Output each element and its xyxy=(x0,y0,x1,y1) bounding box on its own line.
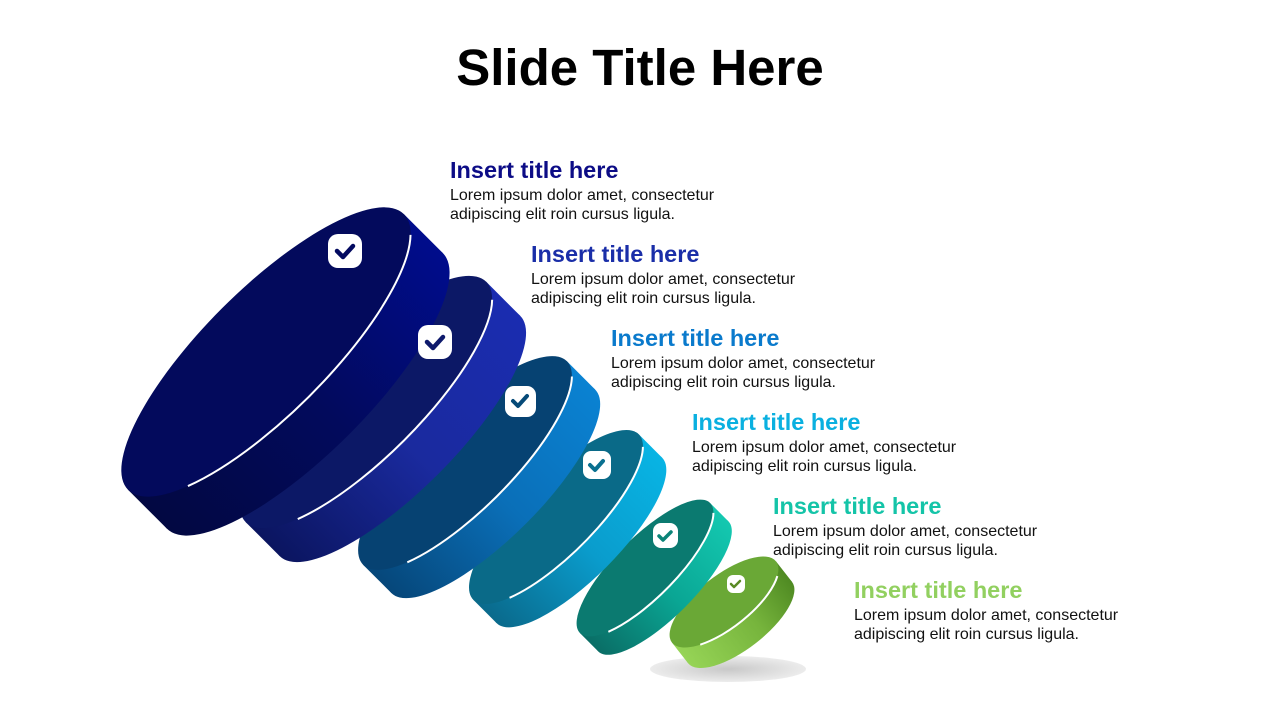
text block 4 xyxy=(692,409,956,475)
disc 1 xyxy=(84,170,487,573)
icon: check 4 xyxy=(583,451,611,479)
text block 6: adipiscing elit roin cursus ligula. xyxy=(854,626,1079,643)
text block 2: Lorem ipsum dolor amet, consectetur xyxy=(531,271,795,288)
text block 3: Insert title here xyxy=(611,325,779,351)
text block 1: Insert title here xyxy=(450,157,618,183)
disc 4 xyxy=(446,407,689,650)
text block 6: Insert title here xyxy=(854,577,1022,603)
text block 1: adipiscing elit roin cursus ligula. xyxy=(450,206,675,223)
text block 5: Lorem ipsum dolor amet, consectetur xyxy=(773,523,1037,540)
title: Slide Title Here xyxy=(456,39,824,96)
disc 3 xyxy=(331,329,628,626)
text block 3 xyxy=(611,325,875,391)
icon: check 5 xyxy=(653,523,678,548)
text block 5: adipiscing elit roin cursus ligula. xyxy=(773,542,998,559)
text block 2: adipiscing elit roin cursus ligula. xyxy=(531,290,756,307)
text block 6 xyxy=(854,577,1118,643)
text block 1: Lorem ipsum dolor amet, consectetur xyxy=(450,187,714,204)
text block 5 xyxy=(773,493,1037,559)
text block 4: adipiscing elit roin cursus ligula. xyxy=(692,458,917,475)
text block 6: Lorem ipsum dolor amet, consectetur xyxy=(854,607,1118,624)
text block 4: Lorem ipsum dolor amet, consectetur xyxy=(692,439,956,456)
icon: check 2 xyxy=(418,325,452,359)
icon: check 1 xyxy=(328,234,362,268)
text block 1 xyxy=(450,157,714,223)
text block 4: Insert title here xyxy=(692,409,860,435)
text block 2 xyxy=(531,241,795,307)
disc 5 xyxy=(559,482,750,673)
icon: check 3 xyxy=(505,386,536,417)
text block 3: Lorem ipsum dolor amet, consectetur xyxy=(611,355,875,372)
text block 2: Insert title here xyxy=(531,241,699,267)
text block 5: Insert title here xyxy=(773,493,941,519)
shadow xyxy=(650,656,806,682)
disc 2 xyxy=(208,244,558,594)
text block 3: adipiscing elit roin cursus ligula. xyxy=(611,374,836,391)
icon: check 6 xyxy=(727,575,745,593)
disc 6 xyxy=(656,541,808,684)
